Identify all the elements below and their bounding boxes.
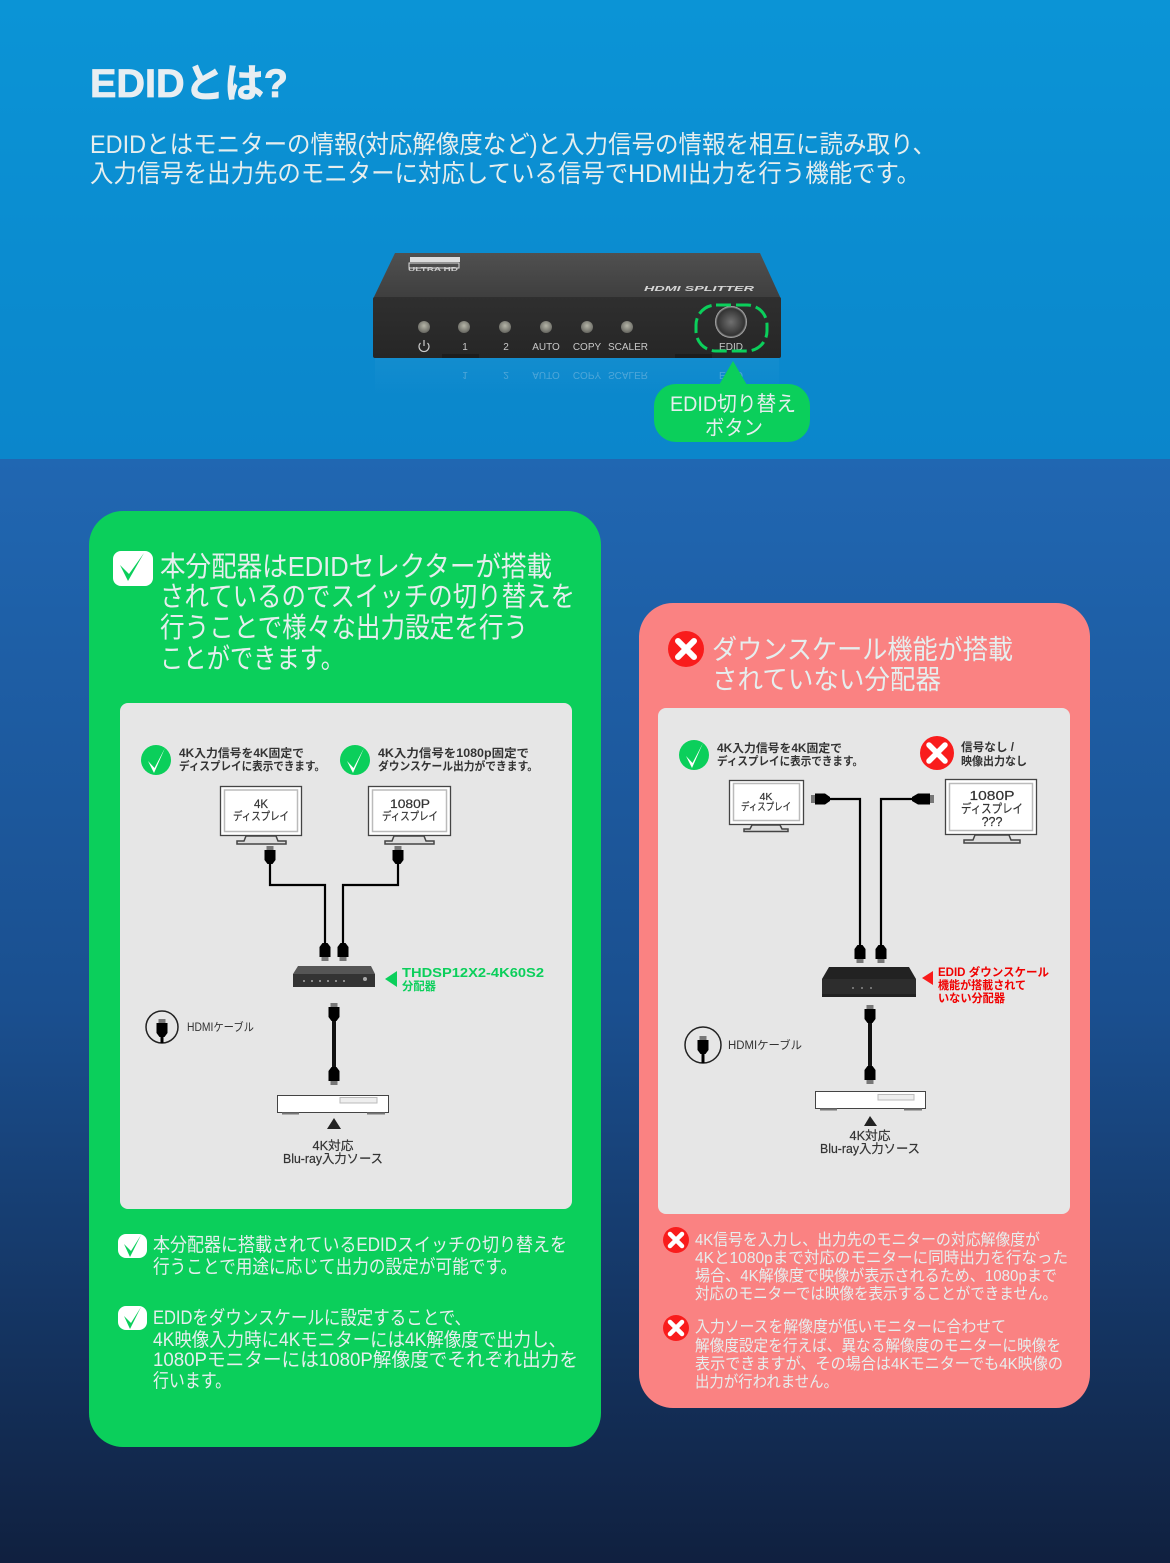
intro text bbox=[90, 131, 936, 188]
note 2: 1080Pモニターには1080P解像度でそれぞれ出力を bbox=[153, 1349, 578, 1371]
EDID button highlight bbox=[696, 305, 767, 351]
note 2: 行います。 bbox=[153, 1370, 231, 1392]
label: 4K fixed bbox=[717, 741, 863, 768]
product photo: HDMI splitter: 1 bbox=[462, 342, 468, 353]
product photo: HDMI splitter: ULTRA HD bbox=[408, 267, 459, 273]
monitor: 1080P: ディスプレイ bbox=[961, 801, 1023, 816]
monitor: 4K: 4K bbox=[254, 799, 268, 811]
label: source bbox=[283, 1139, 383, 1166]
monitor: 4K bbox=[730, 780, 804, 832]
heading: されているのでスイッチの切り替えを bbox=[160, 581, 575, 612]
label: no EDID splitter: 機能が搭載されて bbox=[938, 978, 1026, 992]
label: HDMI cable: HDMIケーブル bbox=[187, 1020, 254, 1034]
Blu-ray source bbox=[278, 1096, 388, 1114]
bottom background bbox=[0, 459, 1170, 1563]
monitor: 1080P: ??? bbox=[982, 815, 1002, 829]
label: no EDID splitter: いない分配器 bbox=[938, 991, 1005, 1005]
intro text: 入力信号を出力先のモニターに対応している信号でHDMI出力を行う機能です。 bbox=[90, 160, 920, 188]
label: source: Blu-ray入力ソース bbox=[820, 1142, 920, 1156]
monitor: 1080P bbox=[946, 780, 1036, 843]
callout: EDID switch button: EDID切り替え bbox=[670, 393, 796, 416]
cables disconnected bbox=[811, 794, 934, 963]
icon: heading cross bbox=[668, 631, 704, 667]
diagram panel bbox=[658, 708, 1070, 1214]
label: no EDID splitter: EDID ダウンスケール bbox=[938, 965, 1049, 979]
note 2: 4K映像入力時に4Kモニターには4K解像度で出力し、 bbox=[153, 1329, 566, 1351]
product photo: HDMI splitter: SCALER bbox=[608, 342, 648, 353]
label: model name: 分配器 bbox=[402, 979, 436, 993]
heading: 本分配器はEDIDセレクターが搭載 bbox=[160, 551, 552, 582]
label: 4K fixed bbox=[179, 746, 325, 773]
monitor: 4K: ディスプレイ bbox=[233, 809, 289, 823]
Blu-ray source bbox=[816, 1092, 926, 1110]
heading: 行うことで様々な出力設定を行う bbox=[160, 612, 528, 643]
label: 1080p fixed bbox=[378, 746, 538, 773]
arrow: source up bbox=[327, 1118, 341, 1129]
label: 4K fixed: ディスプレイに表示できます。 bbox=[179, 759, 325, 773]
icon: HDMI cable legend bbox=[685, 1027, 721, 1063]
icon: cross no signal bbox=[920, 736, 954, 770]
note 1: 行うことで用途に応じて出力の設定が可能です。 bbox=[153, 1256, 517, 1278]
product photo: HDMI splitter: 2 bbox=[503, 369, 509, 380]
note 1 bbox=[118, 1234, 567, 1278]
note 1: 対応のモニターでは映像を表示することができません。 bbox=[695, 1285, 1057, 1303]
splitter device no EDID bbox=[822, 967, 916, 997]
panel: without downscale bbox=[639, 603, 1090, 1408]
product photo: HDMI splitter: HDMI SPLITTER bbox=[644, 286, 754, 293]
heading: されていない分配器 bbox=[712, 665, 941, 695]
label: 4K fixed: 4K入力信号を4K固定で bbox=[717, 741, 842, 755]
label: 4K fixed: ディスプレイに表示できます。 bbox=[717, 754, 863, 768]
product photo: HDMI splitter: 1 bbox=[462, 369, 468, 380]
product photo: HDMI splitter: AUTO bbox=[532, 369, 560, 380]
note 2: 入力ソースを解像度が低いモニターに合わせて bbox=[695, 1318, 1006, 1336]
label: no signal bbox=[961, 740, 1027, 768]
label: no EDID splitter bbox=[938, 965, 1049, 1005]
product photo: HDMI splitter: 2 bbox=[503, 342, 509, 353]
splitter device bbox=[293, 966, 375, 987]
note 1: 4K信号を入力し、出力先のモニターの対応解像度が bbox=[695, 1231, 1040, 1249]
icon: check 1080p bbox=[340, 745, 370, 775]
callout: EDID switch button bbox=[654, 361, 810, 442]
monitor: 4K: 4K bbox=[760, 791, 772, 803]
cable to source bbox=[328, 1003, 340, 1085]
monitor: 1080P bbox=[368, 786, 450, 844]
monitor: 4K: ディスプレイ bbox=[741, 800, 791, 813]
product photo: HDMI splitter: EDID bbox=[719, 369, 743, 380]
product photo: HDMI splitter: COPY bbox=[573, 369, 601, 380]
note 2: 表示できますが、その場合は4Kモニターでも4K映像の bbox=[695, 1355, 1063, 1373]
label: source bbox=[820, 1129, 920, 1156]
label: source: Blu-ray入力ソース bbox=[283, 1152, 383, 1166]
icon: check 4K bbox=[141, 745, 171, 775]
monitor: 1080P: 1080P bbox=[970, 789, 1014, 803]
label: model name: THDSP12X2-4K60S2 bbox=[402, 965, 544, 980]
note 2: EDIDをダウンスケールに設定することで、 bbox=[153, 1307, 471, 1329]
label: 1080p fixed: ダウンスケール出力ができます。 bbox=[378, 759, 538, 773]
label: no signal: 信号なし / bbox=[961, 740, 1015, 754]
cable to source bbox=[864, 1005, 876, 1084]
monitor: 1080P: ディスプレイ bbox=[382, 809, 438, 823]
title: EDIDとは? bbox=[90, 62, 288, 106]
label: source: 4K対応 bbox=[850, 1129, 891, 1143]
product photo: HDMI splitter: EDID bbox=[719, 342, 743, 353]
monitor: 4K bbox=[220, 786, 302, 844]
label: HDMI cable: HDMIケーブル bbox=[728, 1038, 802, 1052]
heading bbox=[160, 551, 575, 674]
heading: ことができます。 bbox=[160, 643, 344, 674]
note 1: 本分配器に搭載されているEDIDスイッチの切り替えを bbox=[153, 1234, 567, 1256]
note 2: 出力が行われません。 bbox=[695, 1373, 838, 1391]
heading: ダウンスケール機能が搭載 bbox=[712, 635, 1013, 665]
note 2 bbox=[663, 1315, 1063, 1391]
monitor: 1080P: 1080P bbox=[390, 799, 430, 811]
note 2: 解像度設定を行えば、異なる解像度のモニターに映像を bbox=[695, 1337, 1061, 1355]
note 1: 4Kと1080pまで対応のモニターに同時出力を行なった bbox=[695, 1249, 1068, 1267]
product photo: HDMI splitter: SCALER bbox=[608, 369, 648, 380]
label: 4K fixed: 4K入力信号を4K固定で bbox=[179, 746, 304, 760]
intro text: EDIDとはモニターの情報(対応解像度など)と入力信号の情報を相互に読み取り、 bbox=[90, 131, 936, 159]
diagram panel bbox=[120, 703, 572, 1209]
panel: with EDID selector bbox=[89, 511, 601, 1447]
note 2 bbox=[118, 1306, 578, 1392]
callout: EDID switch button: ボタン bbox=[705, 417, 763, 440]
product photo: HDMI splitter bbox=[373, 253, 781, 396]
icon: HDMI cable legend bbox=[146, 1011, 178, 1043]
label: no signal: 映像出力なし bbox=[961, 754, 1027, 768]
note 1 bbox=[663, 1227, 1068, 1303]
heading bbox=[712, 635, 1013, 695]
arrow: splitter pointer bbox=[385, 971, 397, 987]
product photo: HDMI splitter: AUTO bbox=[532, 342, 560, 353]
note 1: 場合、4K解像度で映像が表示されるため、1080pまで bbox=[695, 1267, 1057, 1285]
arrow: splitter pointer bbox=[922, 971, 933, 985]
icon: heading check bbox=[113, 551, 153, 586]
top background bbox=[0, 0, 1170, 459]
arrow: source up bbox=[864, 1116, 877, 1126]
icon: check 4K bbox=[679, 740, 709, 770]
label: model name bbox=[402, 965, 544, 993]
label: source: 4K対応 bbox=[312, 1139, 354, 1153]
product photo: HDMI splitter: COPY bbox=[573, 342, 601, 353]
cables to monitors bbox=[264, 846, 404, 961]
label: 1080p fixed: 4K入力信号を1080p固定で bbox=[378, 746, 529, 760]
